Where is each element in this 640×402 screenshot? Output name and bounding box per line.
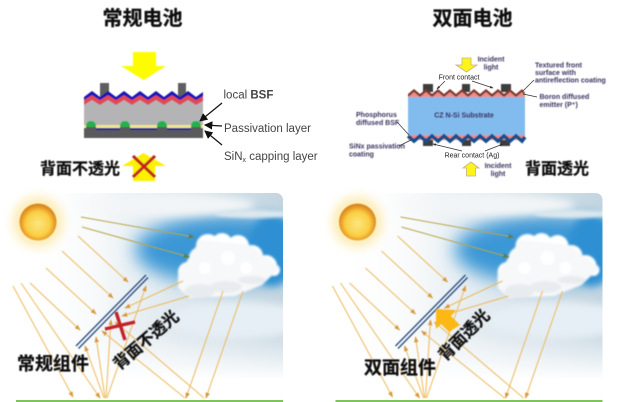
label: rear side opaque: 背面不透光 <box>40 160 120 178</box>
label: front contact: Front contact <box>439 74 479 82</box>
label: rear side transparent: 背面透光 <box>525 160 589 178</box>
label: incident light top: light <box>484 65 499 72</box>
panel: bifacial cell <box>349 7 606 178</box>
label: textured front surface: Textured front <box>535 62 582 70</box>
panel: conventional cell <box>40 7 318 181</box>
label: phosphorus diffused BSF: diffused BSF <box>356 120 400 127</box>
label: phosphorus diffused BSF: Phosphorus <box>356 112 397 119</box>
label: rear side opaque rotated: 背面不透光 <box>110 307 182 373</box>
label: incident light top: Incident <box>478 56 504 64</box>
callout leader lines <box>397 80 537 151</box>
callout arrows <box>200 103 222 145</box>
icon: incident light arrow <box>121 52 166 80</box>
icon: blocked rear light <box>122 153 166 181</box>
panel: bifacial module scene <box>320 185 634 402</box>
cell cross-section diagram <box>408 84 525 146</box>
heading: conventional cell: 常规电池 <box>102 7 182 30</box>
icon: orange arrow through rear side <box>436 309 460 332</box>
label: boron diffused emitter: emitter (P⁺) <box>540 102 578 109</box>
label: SiNx passivation coating: SiNx passivation <box>349 144 405 150</box>
label: substrate: CZ N-Si Substrate <box>434 112 494 120</box>
icon: rear incident light arrow <box>463 162 479 176</box>
label: textured front surface: surface with <box>535 70 576 77</box>
label: SiNx capping layer: capping layer <box>246 151 318 163</box>
label: SiNx capping layer: x <box>243 157 247 164</box>
label: textured front surface: antireflection coating <box>535 78 606 84</box>
cell cross-section diagram <box>84 83 203 138</box>
label: passivation layer: Passivation layer <box>224 123 311 135</box>
label: incident light bottom: light <box>491 171 506 178</box>
icon: red cross blocking rear light <box>105 312 135 340</box>
label: rear contact: Rear contact (Ag) <box>445 152 499 160</box>
label: boron diffused emitter: Boron diffused <box>540 94 589 101</box>
label: bifacial module: 双面组件 <box>364 358 436 378</box>
heading: bifacial cell: 双面电池 <box>432 7 512 30</box>
label: rear side transparent rotated: 背面透光 <box>435 306 493 364</box>
label: SiNx capping layer: SiN <box>224 151 243 163</box>
sky, sun and light rays <box>1 185 315 402</box>
panel: conventional module scene <box>1 185 315 402</box>
label: incident light bottom: Incident <box>485 163 511 170</box>
label: SiNx passivation coating: coating <box>349 151 374 158</box>
sky, sun and light rays <box>320 185 634 402</box>
label: conventional module: 常规组件 <box>17 354 89 374</box>
icon: front incident light arrow <box>456 58 477 72</box>
label: local BSF: local BSF <box>224 90 273 102</box>
